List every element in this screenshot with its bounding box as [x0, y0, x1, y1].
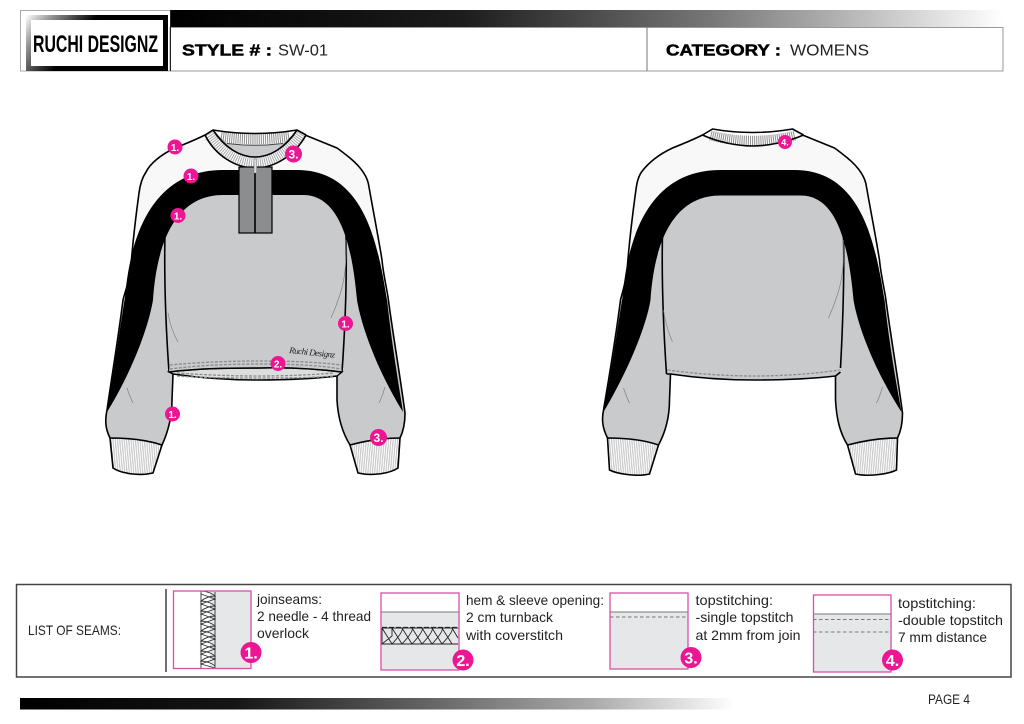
seam callout badges on garments: [165, 135, 792, 446]
seam 4 text: -double topstitch: [898, 612, 1003, 628]
seam 2 text: [465, 592, 604, 643]
footer gradient bar: [20, 698, 735, 710]
body outline and folds: [624, 233, 882, 403]
seam 3: single topstitch swatch: [610, 593, 702, 669]
hem stitching: [666, 370, 840, 380]
category: WOMENS: [790, 42, 869, 60]
seam 2 text: with coverstitch: [465, 627, 563, 643]
seam callout badges on garments: 1.: [171, 143, 179, 154]
seam 3: single topstitch swatch: 3.: [684, 650, 698, 668]
right cuff: [848, 438, 898, 475]
black contrast band: [604, 170, 902, 412]
left cuff: [608, 438, 658, 475]
seam 2 text: 2 cm turnback: [466, 609, 554, 625]
seam callout badges on garments: 1.: [174, 212, 182, 222]
page number: PAGE 4: [928, 692, 970, 707]
seam 1 text: joinseams:: [256, 591, 322, 607]
garment: back view: [603, 129, 902, 475]
seam callout badges on garments: 1.: [341, 320, 350, 330]
seam 2 text: hem & sleeve opening:: [466, 592, 604, 608]
panel: list of seams: [16, 584, 1011, 677]
seam 4: double topstitch swatch: 4.: [886, 653, 899, 670]
seam callout badges on garments: 3.: [373, 431, 384, 445]
garment: front view: [106, 130, 405, 474]
style number: [182, 42, 328, 60]
list of seams heading: LIST OF SEAMS:: [28, 622, 121, 638]
seam 4 text: 7 mm distance: [898, 629, 987, 645]
body outline and folds: [127, 232, 385, 403]
black contrast band: [107, 170, 403, 412]
seam 3 text: at 2mm from join: [696, 627, 800, 643]
neck rib collar: [702, 129, 804, 146]
seam 1: overlock swatch: 1.: [244, 646, 258, 662]
seam 4 text: [898, 595, 1003, 645]
seam callout badges on garments: 1.: [168, 410, 177, 421]
hem stitching: [169, 361, 342, 378]
style number: STYLE # :: [182, 42, 272, 60]
seam callout badges on garments: 4.: [781, 138, 789, 148]
seam 3 text: [696, 592, 800, 643]
seam 1 text: [256, 591, 371, 641]
left cuff: [110, 438, 162, 474]
seam 4: double topstitch swatch: [813, 595, 903, 672]
seam 2: coverstitch swatch: [381, 593, 474, 670]
style number: SW-01: [278, 42, 328, 60]
logo: RUCHI DESIGNZ: [33, 31, 158, 58]
seam 1 text: overlock: [257, 625, 310, 641]
category: [666, 42, 869, 60]
back hem: [169, 368, 342, 380]
garment outline: [106, 135, 405, 445]
seam 4 text: topstitching:: [898, 595, 976, 611]
seam 2: coverstitch swatch: 2.: [456, 653, 470, 670]
garment outline: [603, 135, 902, 445]
logo: [28, 18, 166, 68]
seam 1 text: 2 needle - 4 thread: [257, 608, 371, 624]
seam callout badges on garments: 3.: [288, 148, 299, 162]
seam 1: overlock swatch: [174, 591, 262, 669]
header bar: [20, 10, 1003, 71]
zipper placket: [239, 159, 272, 233]
category: CATEGORY :: [666, 42, 781, 60]
neck rib collar: [205, 130, 306, 168]
seam 3 text: -single topstitch: [696, 609, 794, 625]
right cuff: [350, 438, 400, 474]
seam callout badges on garments: 1.: [187, 172, 195, 183]
brand signature: Ruchi Designz: [288, 345, 336, 360]
seam callout badges on garments: 2.: [274, 360, 282, 370]
seam 3 text: topstitching:: [696, 592, 773, 608]
